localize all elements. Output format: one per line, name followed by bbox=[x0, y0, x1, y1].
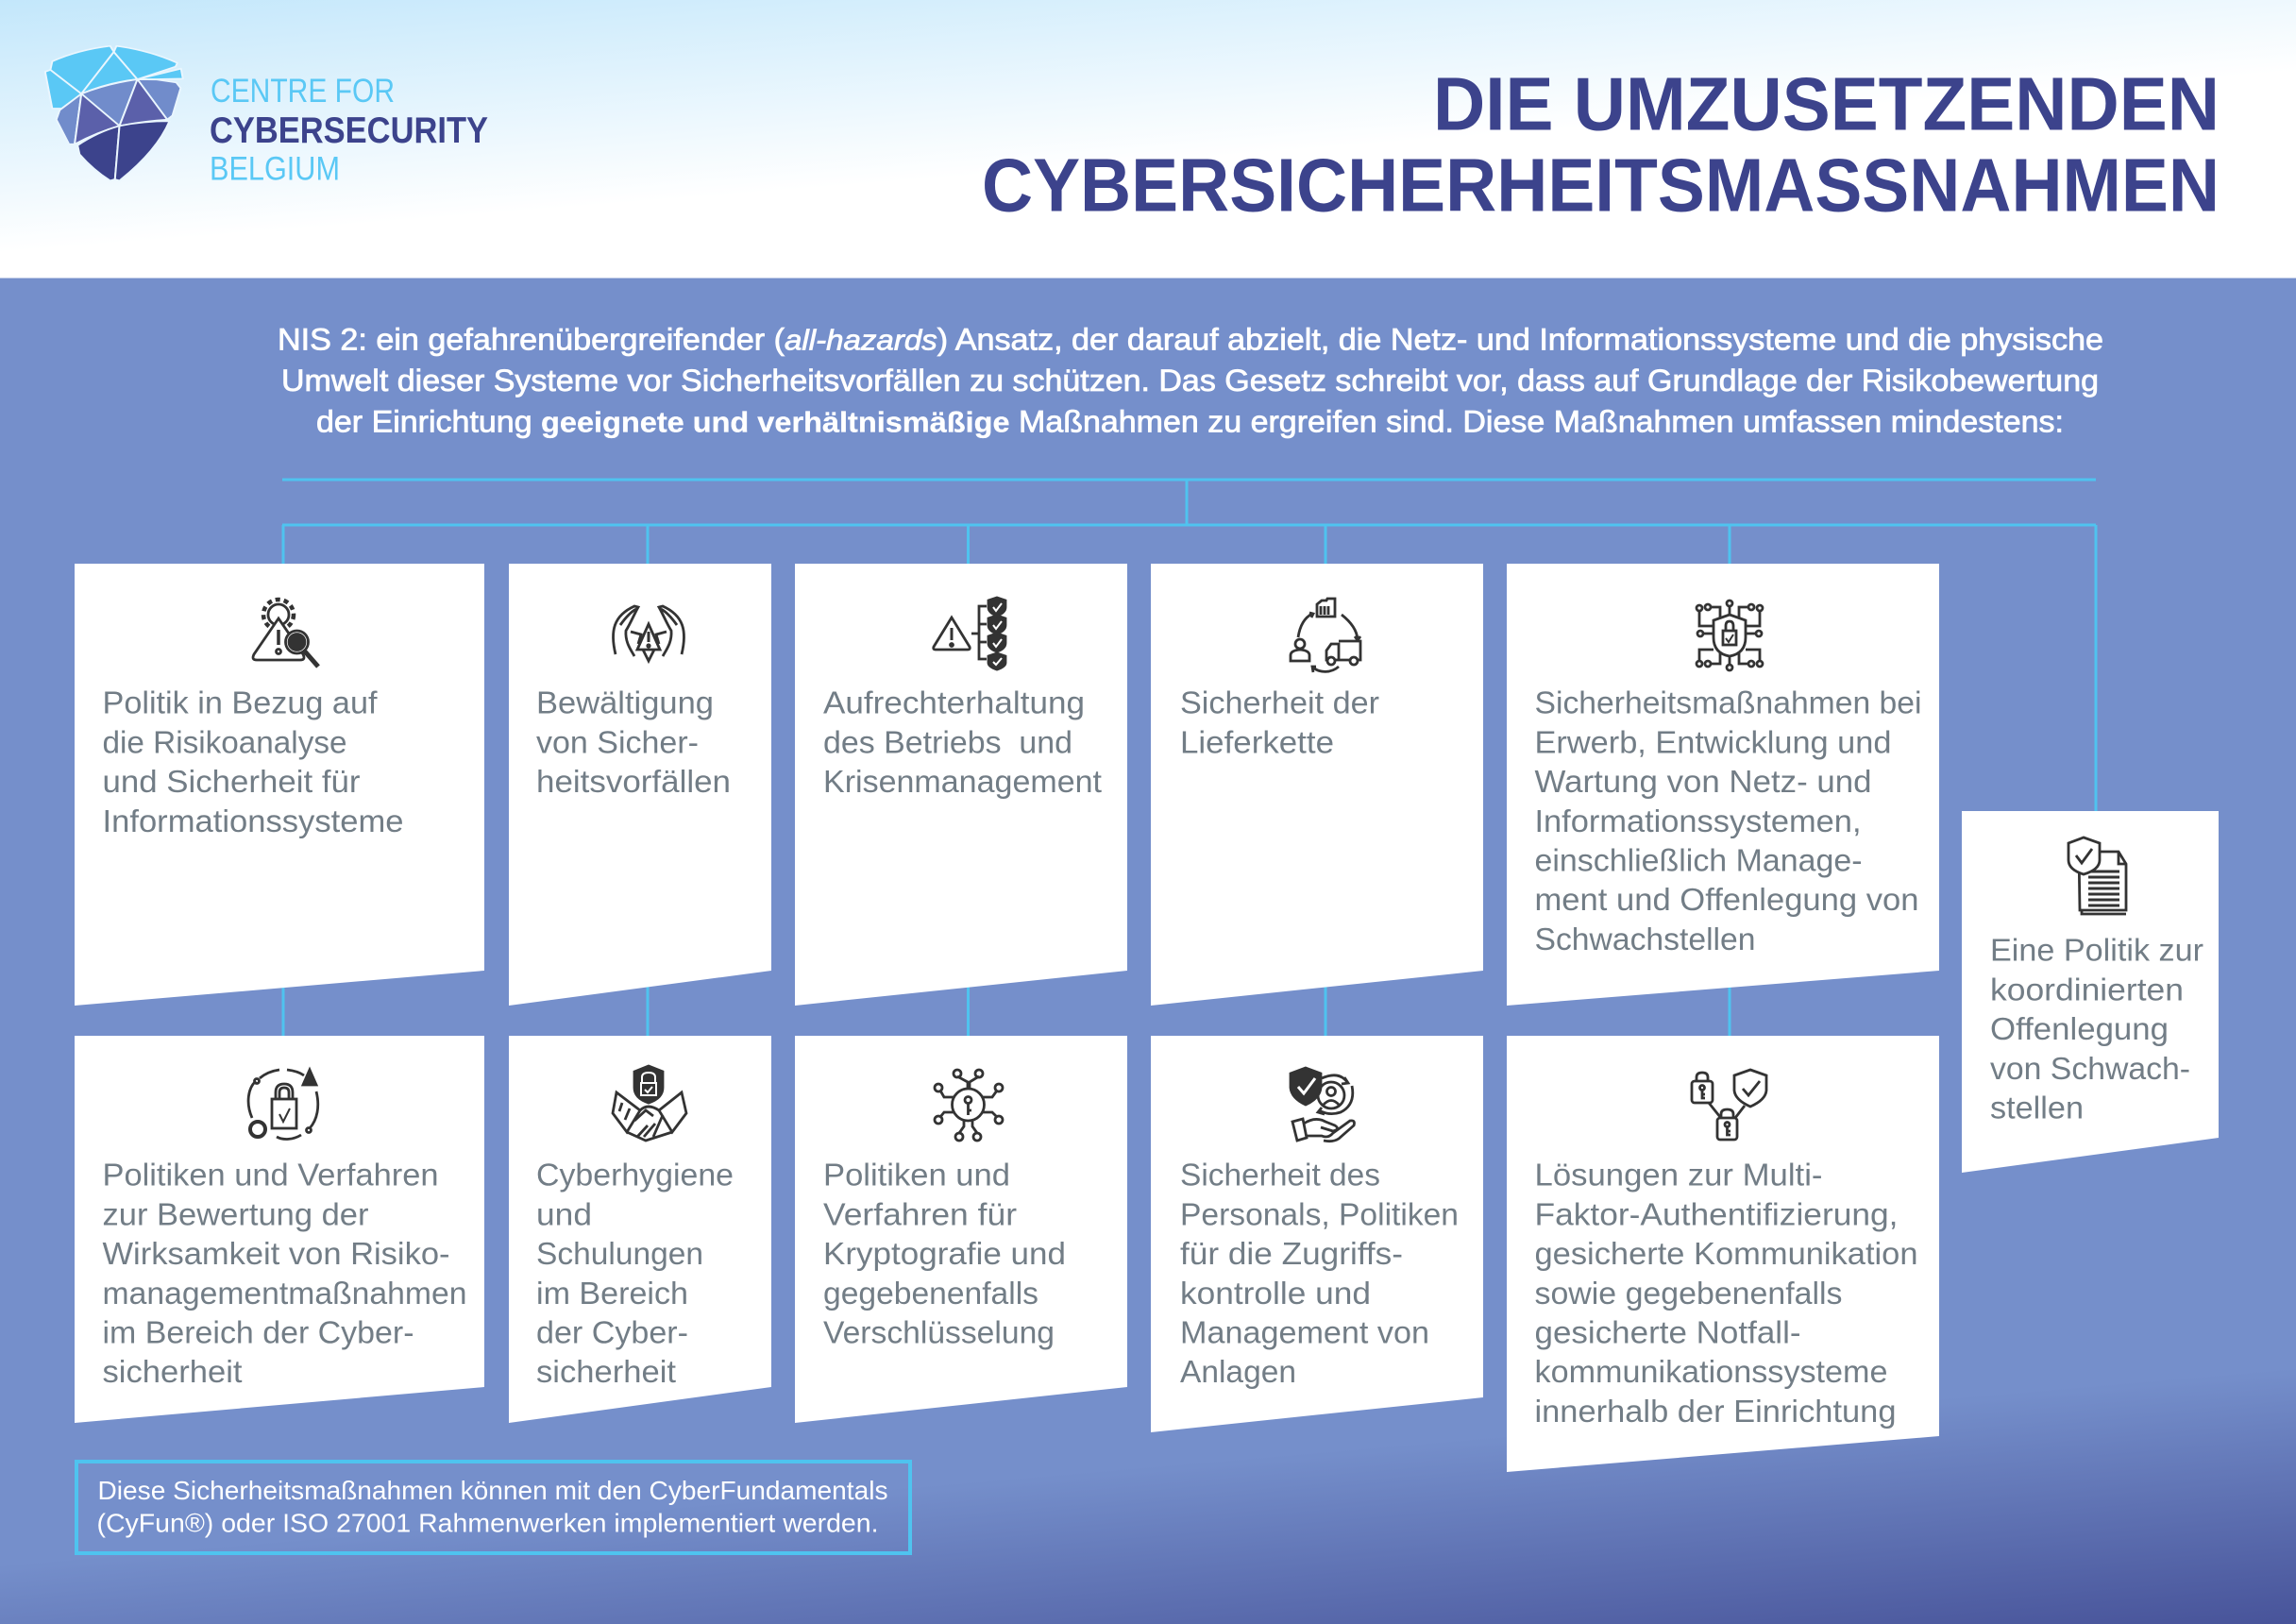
text: Aufrechterhaltung bbox=[823, 686, 1085, 721]
title bbox=[982, 62, 2220, 227]
callout: CyberFundamentals note bbox=[76, 1462, 910, 1553]
text: Offenlegung bbox=[1990, 1012, 2169, 1047]
text: zur Bewertung der bbox=[102, 1197, 368, 1232]
text: Lieferkette bbox=[1180, 725, 1334, 760]
icon: handshake and shield bbox=[613, 1066, 686, 1141]
text bbox=[823, 1159, 1066, 1350]
text: Politiken und bbox=[823, 1159, 1010, 1193]
title: CYBERSICHERHEITSMASSNAHMEN bbox=[982, 144, 2220, 227]
text bbox=[536, 1159, 734, 1390]
intro text: der Einrichtung geeignete und verhältnismäßige Maßnahmen zu ergreifen sind. Diese Maßnahmen umfassen mindestens: bbox=[316, 404, 2064, 438]
text: Eine Politik zur bbox=[1990, 934, 2203, 969]
text bbox=[1180, 686, 1379, 760]
logo text: BELGIUM bbox=[210, 151, 340, 187]
text: koordinierten bbox=[1990, 973, 2184, 1007]
connector lines bbox=[282, 480, 2096, 1036]
card: Kryptografie bbox=[795, 1036, 1127, 1423]
icon: locks and shield network bbox=[1692, 1070, 1766, 1140]
text: Wirksamkeit von Risiko- bbox=[102, 1237, 449, 1272]
text: Sicherheit der bbox=[1180, 686, 1379, 721]
text: Politik in Bezug auf bbox=[102, 686, 378, 721]
text: Verfahren für bbox=[823, 1197, 1017, 1232]
icon: supply chain cycle bbox=[1291, 599, 1360, 672]
text: Faktor-Authentifizierung, bbox=[1535, 1197, 1898, 1232]
card: Cyberhygiene und Schulungen bbox=[509, 1036, 771, 1423]
text bbox=[1535, 1159, 1918, 1429]
card: Wirksamkeit Risikomanagement bbox=[75, 1036, 484, 1423]
text: Erwerb, Entwicklung und bbox=[1535, 725, 1892, 760]
text bbox=[1180, 1159, 1459, 1390]
text: sowie gegebenenfalls bbox=[1535, 1277, 1843, 1311]
text: die Risikoanalyse bbox=[102, 725, 347, 760]
text: Bewältigung bbox=[536, 686, 714, 721]
text: gesicherte Notfall- bbox=[1535, 1316, 1801, 1350]
icon: lock in cycle bbox=[248, 1070, 318, 1139]
icon: circuit shield with lock bbox=[1697, 601, 1763, 670]
text: Sicherheitsmaßnahmen bei bbox=[1535, 686, 1922, 721]
card: Multi-Faktor-Authentifizierung bbox=[1507, 1036, 1939, 1472]
text: Cyberhygiene bbox=[536, 1159, 734, 1193]
card: Sicherheitsvorfälle bbox=[509, 564, 771, 1006]
text bbox=[536, 686, 731, 800]
text: kommunikationssysteme bbox=[1535, 1355, 1888, 1390]
title: DIE UMZUSETZENDEN bbox=[1433, 62, 2220, 145]
text: sicherheit bbox=[102, 1355, 243, 1390]
text: der Cyber- bbox=[536, 1316, 688, 1350]
text: gegebenenfalls bbox=[823, 1277, 1038, 1311]
icon: key network bbox=[935, 1070, 1003, 1141]
text: im Bereich der Cyber- bbox=[102, 1316, 414, 1350]
callout: CyberFundamentals note: Diese Sicherheitsmaßnahmen können mit den CyberFundamentals bbox=[98, 1476, 887, 1505]
text: Sicherheit des bbox=[1180, 1159, 1380, 1193]
text: managementmaßnahmen bbox=[102, 1277, 466, 1311]
icon: hands around warning bell bbox=[613, 606, 684, 661]
text bbox=[102, 1159, 466, 1390]
text: Schwachstellen bbox=[1535, 922, 1756, 957]
text: kontrolle und bbox=[1180, 1277, 1371, 1311]
text: Personals, Politiken bbox=[1180, 1197, 1459, 1232]
intro text: NIS 2: ein gefahrenübergreifender ( all-hazards ) Ansatz, der darauf abzielt, die Netz- und Informationssysteme und die physische bbox=[278, 323, 2103, 357]
text: für die Zugriffs- bbox=[1180, 1237, 1403, 1272]
text: Wartung von Netz- und bbox=[1535, 765, 1871, 800]
card: Risikoanalyse bbox=[75, 564, 484, 1006]
text: des Betriebs und bbox=[823, 725, 1072, 760]
card: Betrieb und Krisenmanagement bbox=[795, 564, 1127, 1006]
text bbox=[102, 686, 404, 839]
text: einschließlich Manage- bbox=[1535, 844, 1862, 878]
text: und bbox=[536, 1197, 592, 1232]
icon: gear, warning triangle and magnifier bbox=[253, 600, 318, 667]
icon: shield, person and hand bbox=[1291, 1068, 1354, 1142]
intro text: Umwelt dieser Systeme vor Sicherheitsvorfällen zu schützen. Das Gesetz schreibt vor, dass auf Grundlage der Risikobewertung bbox=[281, 364, 2099, 398]
text: Kryptografie und bbox=[823, 1237, 1066, 1272]
text: Informationssystemen, bbox=[1535, 804, 1862, 839]
logo text: CENTRE FOR bbox=[211, 73, 395, 110]
text: Management von bbox=[1180, 1316, 1429, 1350]
text: innerhalb der Einrichtung bbox=[1535, 1395, 1896, 1429]
card: Lieferkette bbox=[1151, 564, 1483, 1006]
text: sicherheit bbox=[536, 1355, 677, 1390]
text: Politiken und Verfahren bbox=[102, 1159, 438, 1193]
text bbox=[823, 686, 1103, 800]
text bbox=[1990, 934, 2203, 1125]
logo text: CYBERSECURITY bbox=[210, 110, 488, 151]
intro text bbox=[278, 323, 2103, 438]
text: Schulungen bbox=[536, 1237, 703, 1272]
text: Anlagen bbox=[1180, 1355, 1296, 1390]
text: von Sicher- bbox=[536, 725, 699, 760]
callout: CyberFundamentals note: (CyFun®) oder ISO 27001 Rahmenwerken implementiert werden. bbox=[96, 1509, 879, 1538]
text: stellen bbox=[1990, 1091, 2084, 1125]
text: und Sicherheit für bbox=[102, 765, 361, 800]
text: im Bereich bbox=[536, 1277, 688, 1311]
card: koordinierte Offenlegung bbox=[1962, 811, 2219, 1173]
card: Erwerb, Entwicklung und Wartung bbox=[1507, 564, 1939, 1006]
text: von Schwach- bbox=[1990, 1052, 2190, 1087]
text: Informationssysteme bbox=[102, 804, 404, 839]
icon: shield and document bbox=[2068, 837, 2126, 914]
text: gesicherte Kommunikation bbox=[1535, 1237, 1918, 1272]
icon: logo shield bbox=[45, 46, 183, 180]
card: Personal und Zugriffskontrolle bbox=[1151, 1036, 1483, 1432]
text: heitsvorfällen bbox=[536, 765, 731, 800]
text: ment und Offenlegung von bbox=[1535, 883, 1918, 918]
text: Verschlüsselung bbox=[823, 1316, 1055, 1350]
icon: warning triangle with shield checklist bbox=[934, 598, 1005, 669]
text: Lösungen zur Multi- bbox=[1535, 1159, 1822, 1193]
text: Krisenmanagement bbox=[823, 765, 1103, 800]
logo text bbox=[210, 73, 488, 187]
text bbox=[1535, 686, 1922, 957]
logo: Centre for Cybersecurity Belgium bbox=[45, 46, 488, 187]
